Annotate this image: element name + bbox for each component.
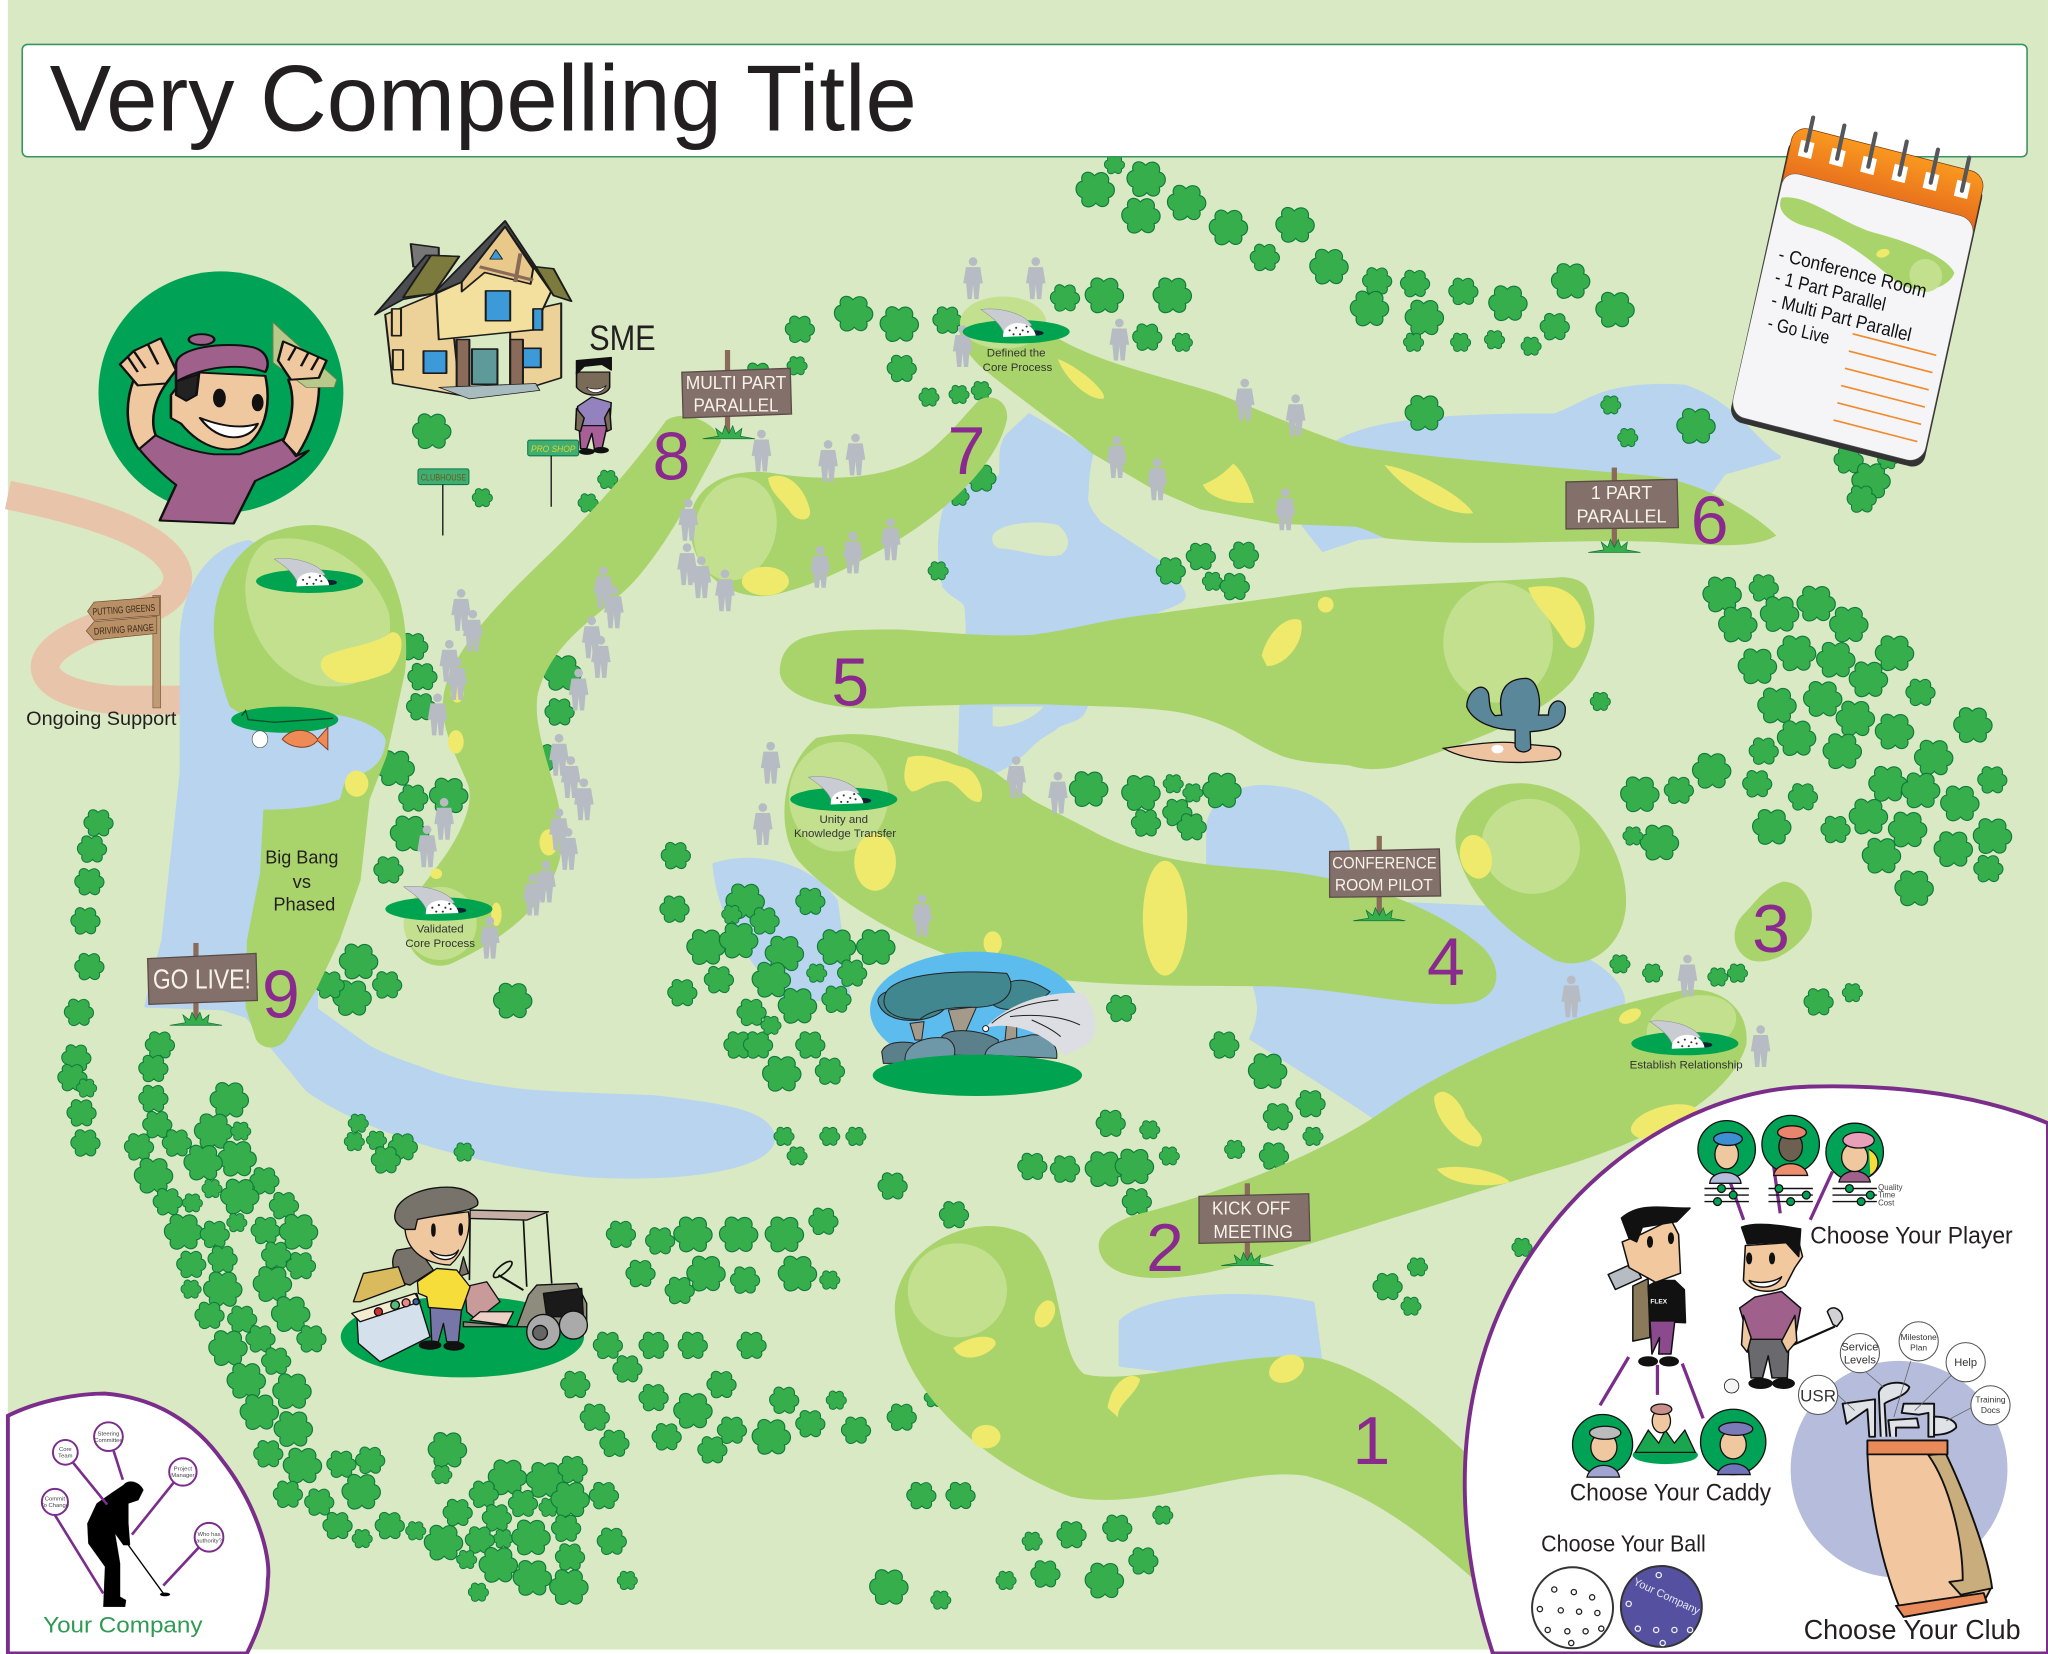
hole numbers: 5: [831, 645, 869, 720]
panel: your company: Steering: [98, 1431, 119, 1437]
panel: choose your tools: Help: [1954, 1357, 1977, 1369]
notepad with hole scorecard: - Go Live: [1766, 313, 1831, 349]
hole numbers: 6: [1691, 483, 1729, 558]
panel: your company: Manager: [171, 1473, 194, 1479]
panel: your company: Core: [59, 1447, 72, 1453]
golf bag with clubs: [1843, 1383, 1992, 1617]
milestone: unity and knowledge transfer: Knowledge Transfer: [794, 828, 896, 840]
hole 7: [690, 397, 1007, 596]
hole 5: [780, 577, 1594, 769]
panel: choose your tools: Levels: [1844, 1355, 1876, 1367]
fairways: [214, 302, 1812, 1587]
lake bay over hole 9: [196, 707, 386, 810]
milestone: validated core process: [385, 886, 492, 950]
hole 4 tee-to-green: [784, 734, 1496, 1004]
milestone: defined the core process: Defined the: [987, 348, 1046, 360]
hole numbers: 1: [1353, 1404, 1390, 1479]
trade-off sliders: [1704, 1183, 1903, 1207]
pro shop sign: PRO SHOP: [531, 444, 576, 454]
panel: your company: Team: [58, 1454, 73, 1460]
notepad with hole scorecard: - 1 Part Parallel: [1773, 267, 1888, 316]
light greens: [245, 296, 1743, 1337]
water islands: [992, 523, 1068, 727]
milestone: defined the core process: Core Process: [983, 362, 1053, 374]
sign: 1 part parallel: [1566, 468, 1678, 552]
trade-off sliders: Cost: [1878, 1198, 1895, 1207]
sign: conference room pilot: [1330, 836, 1441, 921]
sign: kick off meeting: [1199, 1183, 1310, 1266]
hole 8: [406, 416, 721, 966]
role connectors: [55, 1451, 199, 1593]
SME label and character: [575, 319, 656, 454]
panel: choose your tools: Milestone: [1901, 1332, 1937, 1342]
clubhouse sign: [418, 469, 469, 535]
trade-off sliders: Time: [1878, 1191, 1895, 1200]
sign: multi part parallel: PARALLEL: [694, 394, 778, 415]
milestone: unity and knowledge transfer: [790, 777, 897, 840]
club labels: [1838, 1361, 1971, 1421]
hole numbers: 7: [948, 414, 985, 489]
hole 2: [1099, 990, 1747, 1278]
water ball and fish: [231, 707, 338, 750]
hole numbers: 3: [1752, 892, 1790, 967]
hole icon: green 9: [256, 558, 363, 593]
milestone: validated core process: Core Process: [405, 938, 475, 950]
hole 3 tee: [1735, 882, 1812, 961]
sign: conference room pilot: CONFERENCE: [1332, 854, 1437, 873]
panel: choose your tools: Docs: [1981, 1405, 2000, 1415]
milestone: validated core process: Validated: [417, 924, 464, 936]
hole numbers: [262, 414, 1790, 1479]
directional signpost: PUTTING GREENS: [92, 603, 156, 618]
clubhouse: [375, 221, 571, 399]
panel: choose your tools: Training: [1975, 1395, 2006, 1405]
heading: choose your caddy: Choose Your Caddy: [1570, 1480, 1772, 1507]
notepad with hole scorecard: - Multi Part Parallel: [1769, 290, 1913, 346]
big bang vs phased note: vs: [293, 871, 311, 892]
cheering man in green circle: [99, 271, 343, 524]
panel: your company: authority?: [196, 1538, 223, 1544]
heading: choose your club: Choose Your Club: [1804, 1614, 2021, 1645]
hole numbers: 8: [652, 419, 690, 494]
water hazards: [146, 386, 1779, 1371]
panel: your company: Commit: [45, 1497, 65, 1503]
title banner: Very Compelling Title: [50, 46, 917, 151]
directional signpost: DRIVING RANGE: [94, 623, 155, 638]
panel: choose your tools: Plan: [1910, 1342, 1927, 1352]
cactus: [1443, 678, 1565, 762]
sign: 1 part parallel: 1 PART: [1591, 482, 1652, 503]
player figure: [1724, 1224, 1843, 1393]
balls: Your Company: [1631, 1576, 1702, 1618]
milestone: defined the core process: [963, 309, 1070, 374]
milestone: unity and knowledge transfer: Unity and: [819, 814, 868, 826]
player avatars: [1698, 1115, 1883, 1183]
caddy shirt logo: FLEX: [1650, 1298, 1668, 1305]
sign: 1 part parallel: PARALLEL: [1576, 505, 1667, 526]
milestone: establish relationship: Establish Relationship: [1630, 1059, 1743, 1071]
notepad with hole scorecard: [1728, 113, 1990, 470]
clubhouse sign: CLUBHOUSE: [421, 473, 466, 483]
heading: choose your ball: Choose Your Ball: [1541, 1531, 1706, 1557]
sand traps: [321, 359, 1703, 1448]
sign: go live: [148, 943, 257, 1025]
panel: your company: Committee: [94, 1438, 123, 1444]
ongoing support label: Ongoing Support: [26, 708, 177, 730]
pro shop sign: [528, 440, 579, 507]
panel: your company: To Change: [41, 1503, 69, 1509]
hole 6: [960, 302, 1776, 545]
sign: multi part parallel: [682, 350, 792, 439]
sign: kick off meeting: KICK OFF: [1212, 1198, 1290, 1219]
balls: [1532, 1566, 1702, 1648]
tree scene with slicing ball: [870, 952, 1095, 1096]
hole 3 green: [1455, 783, 1626, 963]
big bang vs phased note: Big Bang: [265, 846, 338, 867]
company name: Your Company: [43, 1613, 203, 1638]
hole 1: [895, 1226, 1482, 1587]
panel: your company: Who has: [197, 1532, 221, 1538]
hole 9: [214, 525, 406, 1047]
caddy figure: [1608, 1207, 1690, 1366]
hole numbers: 4: [1427, 925, 1465, 1000]
silhouette golfer: [87, 1482, 170, 1607]
panel: choose your tools: Service: [1841, 1341, 1878, 1353]
cart path: [8, 495, 186, 700]
panel headings: Choose Your Player: [1810, 1222, 2013, 1249]
sign: multi part parallel: MULTI PART: [686, 372, 786, 393]
panel: choose your tools: USR: [1800, 1386, 1836, 1405]
caddy avatars: [1573, 1404, 1766, 1477]
sign: kick off meeting: MEETING: [1213, 1221, 1293, 1242]
milestone: establish relationship: [1630, 1021, 1743, 1071]
sign: go live: GO LIVE!: [153, 964, 251, 995]
connector lines: [1600, 1166, 1832, 1418]
directional signpost: [86, 596, 161, 708]
hole numbers: 2: [1146, 1211, 1184, 1286]
lavender club circle: [1791, 1361, 2007, 1578]
golfers: gallery of people: [417, 257, 1770, 1067]
notepad with hole scorecard: - Conference Room: [1777, 244, 1928, 303]
title banner: [22, 44, 2027, 157]
panel: your company: Project: [174, 1467, 192, 1473]
panel: choose your tools: [1465, 1086, 2048, 1653]
big bang vs phased note: Phased: [273, 893, 335, 914]
panel: your company: [8, 1394, 268, 1653]
caddie with cart and cooler: [341, 1187, 587, 1377]
trade-off sliders: Quality: [1878, 1183, 1903, 1192]
sign: conference room pilot: ROOM PILOT: [1335, 876, 1433, 895]
hole numbers: 9: [262, 957, 300, 1032]
SME label and character: SME: [589, 319, 656, 358]
